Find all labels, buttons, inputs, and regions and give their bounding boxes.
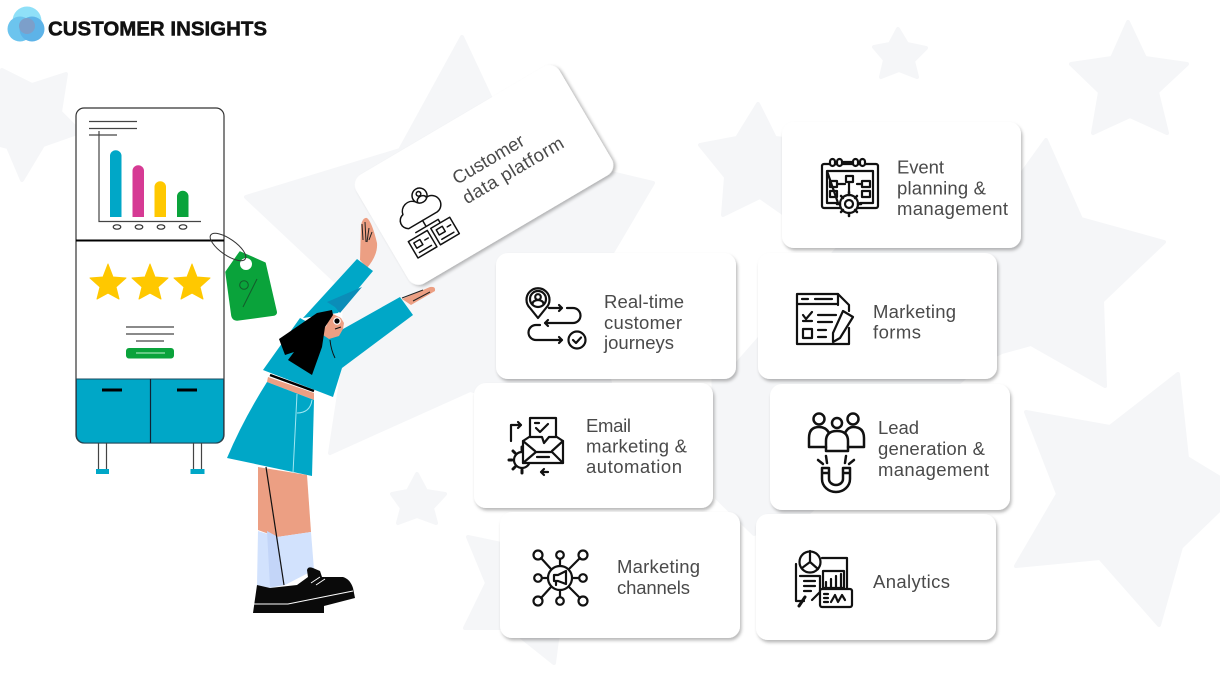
panel: lead generation bbox=[770, 384, 1010, 510]
bar: yellow bbox=[154, 181, 166, 217]
upper sleeve bbox=[303, 259, 373, 318]
hair bbox=[279, 310, 333, 375]
text: email marketing bbox=[586, 415, 688, 477]
shoes bbox=[253, 567, 355, 613]
skirt bbox=[227, 382, 314, 476]
text: customer data platform line 1: Customer bbox=[448, 130, 528, 188]
rating stars bbox=[90, 264, 210, 299]
price tag bbox=[206, 228, 276, 320]
icon: route with pin bbox=[526, 288, 586, 348]
chart text lines bbox=[89, 122, 137, 135]
text: email marketing: marketing & bbox=[586, 436, 688, 456]
text: event planning: Event bbox=[897, 156, 944, 178]
furniture board with chart and rating bbox=[76, 108, 224, 474]
text: marketing forms: Marketing bbox=[873, 301, 956, 322]
text: email marketing: Email bbox=[586, 415, 631, 436]
button line bbox=[136, 352, 165, 354]
text: marketing channels: channels bbox=[617, 577, 690, 598]
text: lead generation bbox=[878, 417, 989, 480]
ear bbox=[320, 326, 330, 336]
text: lead generation: management bbox=[878, 459, 989, 480]
cabinet divider bbox=[150, 379, 152, 443]
hand line bbox=[402, 290, 430, 301]
feet bbox=[96, 469, 204, 474]
text: event planning bbox=[897, 156, 1008, 219]
mouth and collar bbox=[330, 327, 341, 358]
text: real-time customer journeys bbox=[603, 291, 684, 353]
face bbox=[323, 313, 344, 339]
finger lines bbox=[362, 222, 372, 242]
text: real-time customer journeys: journeys bbox=[603, 332, 674, 353]
text: real-time customer journeys: Real-time bbox=[604, 291, 684, 312]
cabinet bbox=[76, 379, 224, 443]
waist skin bbox=[267, 377, 314, 400]
green button bbox=[126, 348, 174, 358]
woman reaching up bbox=[227, 218, 435, 613]
panel: real-time customer journeys bbox=[496, 253, 736, 379]
icon: people and magnet bbox=[809, 414, 864, 492]
eye white bbox=[333, 317, 341, 325]
icon: calendar bbox=[822, 159, 878, 216]
panel: marketing forms bbox=[758, 253, 997, 379]
leg line bbox=[266, 467, 284, 585]
jacket torso bbox=[263, 318, 342, 397]
raised hand bbox=[360, 218, 377, 268]
text: email marketing: automation bbox=[586, 456, 682, 477]
sock shade bbox=[267, 531, 284, 587]
panel: customer data platform bbox=[350, 61, 618, 289]
text: real-time customer journeys: customer bbox=[604, 312, 682, 333]
eye bbox=[334, 318, 340, 324]
legs bbox=[258, 467, 311, 537]
text: analytics: Analytics bbox=[873, 571, 950, 592]
socks bbox=[257, 531, 314, 588]
text: marketing channels bbox=[617, 556, 700, 598]
text: marketing channels: Marketing bbox=[617, 556, 700, 577]
text: event planning: management bbox=[897, 198, 1008, 219]
text: marketing forms: forms bbox=[873, 322, 921, 342]
shelf line bbox=[76, 240, 224, 242]
logo icon bbox=[8, 6, 44, 42]
text: lead generation: generation & bbox=[878, 438, 986, 459]
legs bbox=[98, 443, 202, 470]
title: CUSTOMER INSIGHTS bbox=[48, 18, 267, 40]
panel: analytics bbox=[756, 514, 996, 640]
icon: envelope with gear bbox=[509, 418, 563, 475]
icon: network megaphone bbox=[534, 550, 588, 606]
waist band bbox=[270, 375, 314, 391]
shoe highlights bbox=[254, 577, 353, 604]
panel: marketing channels bbox=[500, 512, 740, 638]
icon: cloud with documents bbox=[387, 181, 459, 258]
bar: green bbox=[177, 191, 188, 217]
text: marketing forms bbox=[873, 301, 956, 342]
lower sleeve bbox=[327, 297, 413, 368]
sleeve shade bbox=[327, 287, 362, 313]
bar: pink bbox=[132, 165, 144, 217]
bar: blue bbox=[110, 150, 122, 217]
rating text lines bbox=[126, 327, 174, 341]
reaching hand bbox=[402, 287, 435, 305]
text: lead generation: Lead bbox=[878, 417, 919, 438]
text: customer data platform line 2: data platform bbox=[458, 132, 567, 208]
icon: charts and report bbox=[796, 551, 852, 607]
chart axes bbox=[99, 131, 201, 222]
axis ovals bbox=[113, 225, 187, 229]
panel: email marketing bbox=[474, 383, 713, 508]
text: event planning: planning & bbox=[897, 178, 987, 198]
handles bbox=[102, 388, 197, 392]
icon: form with pencil bbox=[797, 294, 853, 344]
panel: event planning bbox=[782, 122, 1021, 248]
skirt seam bbox=[293, 394, 312, 473]
